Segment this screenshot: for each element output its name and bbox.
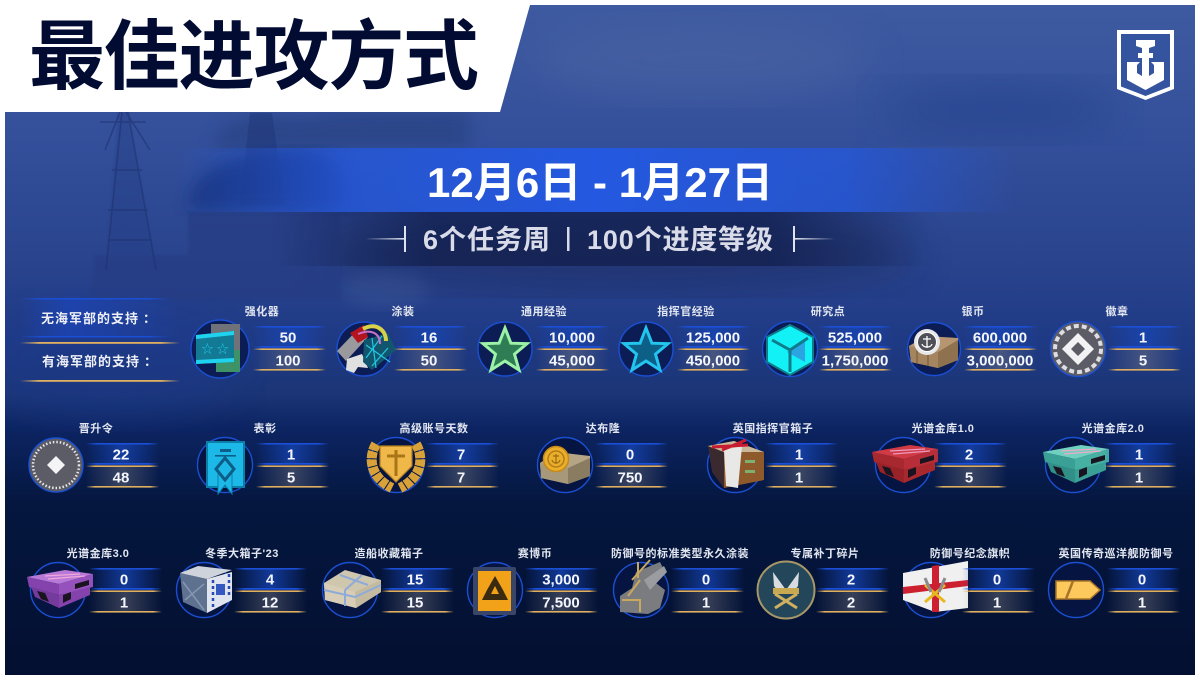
item: 赛博币: 3,000 — [542, 572, 580, 588]
item: 表彰 — [198, 421, 329, 494]
item: 晋升令: 晋升令 — [79, 421, 113, 435]
item: 达布隆: 达布隆 — [586, 421, 620, 435]
item: 光谱金库3.0: 1 — [120, 594, 128, 612]
item: 防御号的标准类型永久涂装 — [611, 546, 749, 618]
item: 达布隆 — [538, 421, 668, 492]
item: 银币: 600,000 — [973, 330, 1027, 346]
item: 英国传奇巡洋舰防御号: 1 — [1138, 594, 1146, 612]
icon: cruiser tag — [1048, 562, 1104, 618]
icon: camouflage — [337, 322, 396, 376]
icon: green star — [478, 322, 532, 376]
item: 表彰: 5 — [287, 470, 295, 486]
item: 光谱金库1.0: 2 — [965, 446, 973, 464]
subtitle text: 6个任务周 — [423, 225, 550, 255]
item: 英国传奇巡洋舰防御号: 英国传奇巡洋舰防御号 — [1058, 546, 1174, 560]
item: 通用经验 — [478, 304, 609, 376]
item: 通用经验: 通用经验 — [521, 304, 567, 318]
item: 造船收藏箱子: 15 — [407, 572, 423, 588]
legend labels: 无海军部的支持 ： — [41, 311, 157, 326]
logo: shield anchor — [1117, 30, 1174, 100]
item: 防御号纪念旗帜 — [903, 546, 1035, 618]
icon: emblem — [1050, 322, 1106, 376]
item: 英国传奇巡洋舰防御号: 0 — [1138, 572, 1146, 588]
item: 晋升令: 22 — [113, 446, 129, 464]
subtitle band: 100个进度等级 — [587, 225, 773, 255]
item: 造船收藏箱子: 15 — [407, 594, 423, 612]
item: 赛博币: 赛博币 — [518, 546, 552, 560]
icon: cyber coin card — [468, 562, 522, 618]
item: 指挥官经验: 125,000 — [686, 330, 740, 346]
item: 英国指挥官箱子: 1 — [795, 446, 803, 464]
item: 防御号纪念旗帜: 防御号纪念旗帜 — [930, 546, 1010, 560]
item: 光谱金库2.0: 1 — [1135, 446, 1143, 464]
item: 光谱金库3.0: 光谱金库3.0 — [67, 546, 129, 560]
item: 银币: 3,000,000 — [967, 352, 1033, 370]
item: 冬季大箱子'23: 4 — [266, 572, 275, 588]
title banner — [0, 0, 530, 112]
date band — [175, 148, 1015, 212]
item: 专属补丁碎片 — [758, 546, 889, 618]
item: 银币 — [908, 304, 1037, 376]
icon: teal chest — [1043, 438, 1109, 492]
item: 徽章 — [1050, 304, 1181, 376]
item: 冬季大箱子'23: 冬季大箱子'23 — [205, 546, 279, 560]
item: 防御号的标准类型永久涂装: 0 — [702, 572, 710, 588]
item: 指挥官经验: 450,000 — [686, 352, 740, 370]
item: 晋升令: 48 — [113, 470, 129, 486]
item: 高级账号天数: 7 — [457, 446, 465, 464]
item: 强化器 — [191, 304, 326, 378]
icon: premium laurel — [368, 438, 424, 492]
item: 达布隆: 0 — [626, 446, 634, 464]
item: 表彰: 1 — [287, 446, 295, 464]
item: 防御号的标准类型永久涂装: 1 — [702, 594, 710, 612]
icon: purple chest — [27, 562, 93, 618]
item: 涂装: 16 — [421, 330, 437, 346]
item: 徽章: 5 — [1139, 352, 1147, 370]
icon: commendation — [198, 438, 252, 494]
item: 造船收藏箱子: 造船收藏箱子 — [354, 546, 424, 560]
item: 光谱金库3.0: 0 — [120, 572, 128, 588]
item: 赛博币: 7,500 — [542, 594, 580, 612]
icon: Defence camouflage — [614, 560, 668, 618]
item: 光谱金库2.0 — [1043, 421, 1177, 492]
icon: patch — [758, 562, 814, 618]
icon: boosters: ☆ ☆ — [201, 342, 229, 356]
item: 英国传奇巡洋舰防御号 — [1048, 546, 1180, 618]
item: 涂装: 50 — [421, 352, 437, 370]
item: 强化器: 50 — [280, 330, 296, 346]
item: 晋升令 — [29, 421, 159, 492]
item: 光谱金库1.0: 光谱金库1.0 — [912, 421, 974, 435]
item: 指挥官经验 — [619, 304, 750, 376]
item: 高级账号天数 — [368, 421, 499, 492]
item: 表彰: 表彰 — [254, 421, 276, 435]
item: 达布隆: 750 — [617, 470, 643, 486]
item: 高级账号天数: 高级账号天数 — [400, 421, 468, 435]
item: 冬季大箱子'23 — [176, 546, 307, 618]
item: 通用经验: 10,000 — [549, 330, 595, 346]
item: 专属补丁碎片: 2 — [847, 572, 855, 588]
item: 冬季大箱子'23: 12 — [262, 594, 278, 612]
item: 防御号的标准类型永久涂装: 防御号的标准类型永久涂装 — [611, 546, 749, 560]
item: 高级账号天数: 7 — [457, 470, 465, 486]
icon: research hexagon — [762, 322, 818, 376]
item: 研究点: 525,000 — [828, 330, 882, 346]
item: 光谱金库2.0: 1 — [1135, 470, 1143, 486]
item: 造船收藏箱子 — [322, 546, 454, 618]
item: 英国指挥官箱子 — [708, 421, 838, 492]
icon: gift crate — [322, 562, 381, 618]
item: 通用经验: 45,000 — [549, 352, 595, 370]
icon: doubloon crate — [538, 438, 592, 492]
subtitle band — [270, 212, 930, 266]
item: 防御号纪念旗帜: 0 — [993, 572, 1001, 588]
date range: 12月6日 - 1月27日 — [427, 159, 773, 206]
item: 徽章: 1 — [1139, 330, 1147, 346]
item: 专属补丁碎片: 2 — [847, 594, 855, 612]
icon: winter crate — [176, 562, 232, 618]
item: 指挥官经验: 指挥官经验 — [657, 304, 715, 318]
item: 英国指挥官箱子: 英国指挥官箱子 — [733, 421, 813, 435]
icon: blue star — [619, 322, 673, 376]
item: 徽章: 徽章 — [1106, 304, 1128, 318]
item: 研究点: 研究点 — [811, 304, 845, 318]
icon: silver crate — [908, 322, 960, 376]
legend labels — [20, 298, 180, 382]
title: 最佳进攻方式 — [29, 15, 479, 100]
item: 研究点: 1,750,000 — [822, 352, 888, 370]
item: 光谱金库1.0: 5 — [965, 470, 973, 486]
item: 研究点 — [762, 304, 892, 376]
item: 赛博币 — [468, 546, 598, 618]
item: 光谱金库2.0: 光谱金库2.0 — [1082, 421, 1144, 435]
item: 防御号纪念旗帜: 1 — [993, 594, 1001, 612]
smoke and superstructure — [190, 150, 346, 210]
item: 银币: 银币 — [962, 304, 984, 318]
item: 涂装: 涂装 — [392, 304, 414, 318]
icon: commemorative flag — [903, 561, 968, 618]
icon: red chest — [872, 438, 938, 492]
item: 涂装 — [337, 304, 467, 376]
legend labels: 有海军部的支持 ： — [42, 354, 158, 369]
item: 专属补丁碎片: 专属补丁碎片 — [790, 546, 860, 560]
item: 强化器: 强化器 — [245, 304, 279, 318]
icon: promotion — [29, 438, 83, 492]
icon: UK commander box — [708, 438, 764, 492]
item: 光谱金库1.0 — [872, 421, 1007, 492]
item: 强化器: 100 — [275, 352, 301, 370]
item: 光谱金库3.0 — [27, 546, 162, 618]
item: 英国指挥官箱子: 1 — [795, 470, 803, 486]
